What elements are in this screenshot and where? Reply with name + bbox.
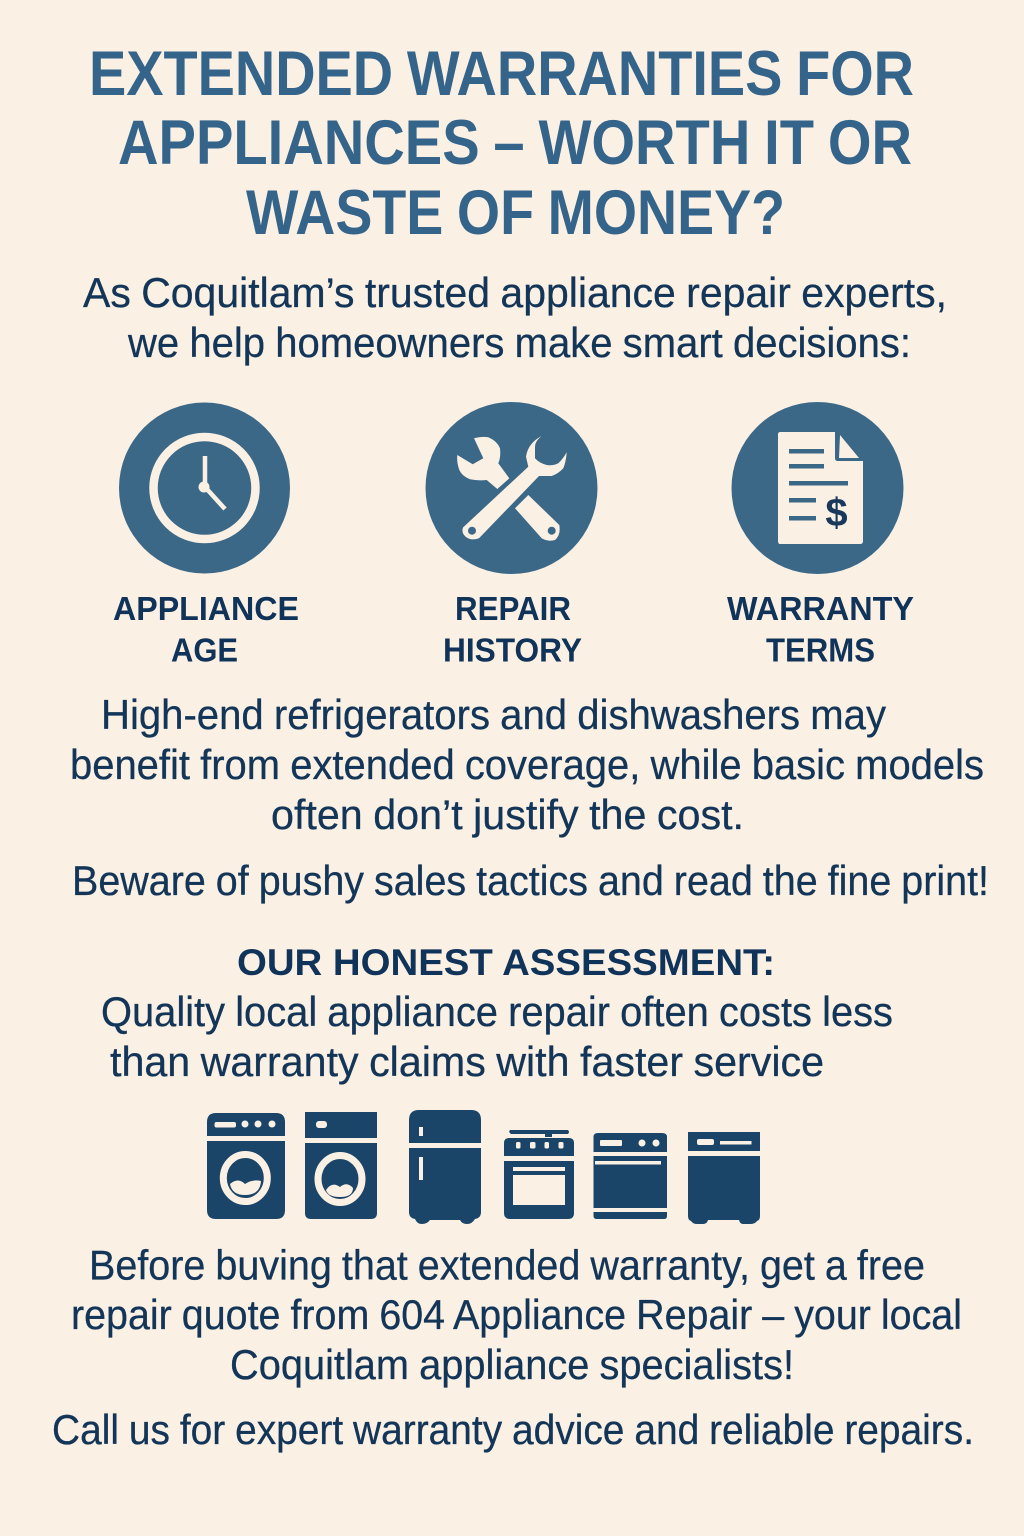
- intro text: [83, 269, 947, 366]
- text: coverage advice: often don’t justify the cost.: [271, 791, 744, 838]
- panel: warranty terms: [727, 402, 914, 668]
- label: warranty terms: [727, 590, 914, 668]
- title: EXTENDED WARRANTIES FOR: [89, 39, 914, 109]
- label: appliance age: APPLIANCE: [113, 590, 299, 627]
- panel: appliance age: [113, 402, 299, 668]
- icon: invoice document: $: [825, 491, 848, 535]
- icon: crossed wrenches: [426, 402, 598, 574]
- text: sales tactics warning: Beware of pushy sales tactics and read the fine print!: [72, 857, 989, 904]
- label: repair history: [443, 590, 582, 668]
- text: free repair quote: Coquitlam appliance specialists!: [230, 1341, 794, 1388]
- icon: invoice document: [732, 402, 904, 574]
- text: assessment: than warranty claims with faster service: [110, 1038, 824, 1085]
- intro text: we help homeowners make smart decisions:: [127, 319, 911, 366]
- text: coverage advice: [70, 691, 984, 838]
- title: APPLIANCES – WORTH IT OR: [118, 108, 912, 178]
- text: free repair quote: Before buving that extended warranty, get a free: [89, 1242, 925, 1288]
- icon: dishwasher: [688, 1132, 760, 1224]
- title: [89, 39, 914, 248]
- panel: repair history: [426, 402, 598, 668]
- icon: refrigerator: [409, 1110, 481, 1224]
- icon row: appliances: [207, 1110, 760, 1224]
- heading: our honest assessment: OUR HONEST ASSESSMENT:: [237, 942, 775, 983]
- text: assessment: Quality local appliance repair often costs less: [101, 988, 893, 1035]
- title: WASTE OF MONEY?: [246, 178, 785, 248]
- label: appliance age: AGE: [171, 632, 238, 668]
- intro text: As Coquitlam’s trusted appliance repair experts,: [83, 269, 947, 316]
- label: warranty terms: WARRANTY: [727, 590, 914, 627]
- label: appliance age: [113, 590, 299, 668]
- icon: stove: [504, 1130, 574, 1219]
- text: free repair quote: repair quote from 604 Appliance Repair – your local: [71, 1291, 962, 1338]
- label: repair history: HISTORY: [443, 632, 582, 668]
- icon: clock: [119, 402, 290, 574]
- text: call to action: Call us for expert warranty advice and reliable repairs.: [52, 1406, 974, 1453]
- label: warranty terms: TERMS: [766, 632, 875, 668]
- label: repair history: REPAIR: [455, 590, 571, 627]
- icon: washer 1: [207, 1113, 285, 1219]
- icon: oven: [594, 1133, 667, 1219]
- text: coverage advice: benefit from extended coverage, while basic models: [70, 741, 984, 788]
- icon: washer 2: [305, 1112, 377, 1219]
- text: free repair quote: [71, 1242, 962, 1388]
- text: coverage advice: High-end refrigerators and dishwashers may: [101, 691, 886, 738]
- text: assessment: [101, 988, 893, 1085]
